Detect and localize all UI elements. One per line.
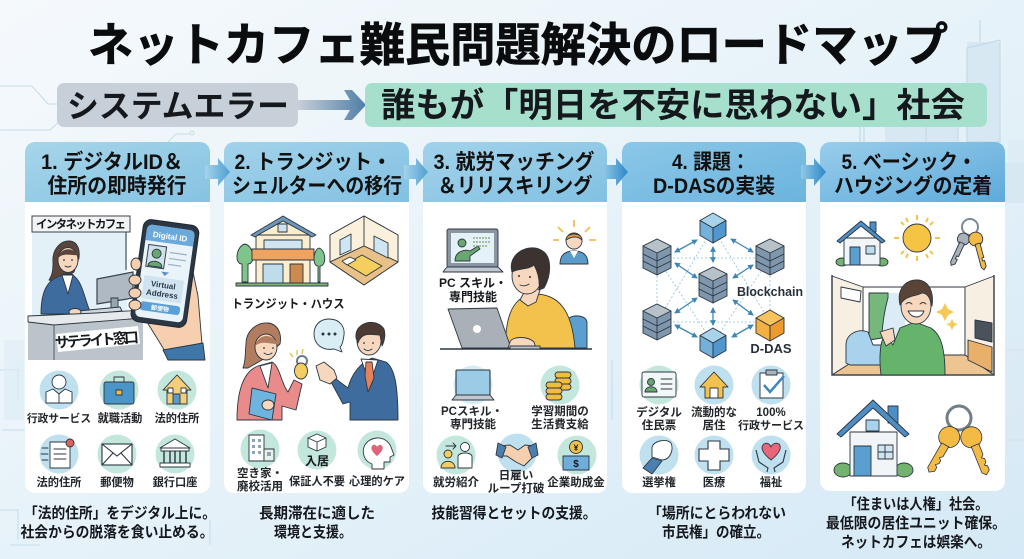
illustration: man working at laptop <box>440 248 592 349</box>
icon: laptop <box>452 366 494 404</box>
panel 4 header: D-DASの実装 <box>653 175 775 198</box>
caption panel 1: 「法的住所」をデジタル上に。 <box>24 504 216 522</box>
label: 福祉 <box>760 475 782 489</box>
label: 選挙権 <box>642 475 676 489</box>
label <box>237 466 283 493</box>
illustration: furnished room <box>330 216 398 285</box>
label: 銀行口座 <box>153 475 197 489</box>
arrow 4 to 5 <box>801 158 826 186</box>
illustration: online class laptop <box>443 229 503 272</box>
panel 1 header: 住所の即時発行 <box>48 175 186 198</box>
icon: mobile residence <box>694 366 734 404</box>
label: 医療 <box>703 475 725 489</box>
panel 5 header: ハウジングの定着 <box>834 174 992 198</box>
illustration: satellite counter at internet cafe: インタネットカフェ <box>36 218 126 231</box>
label: 居住 <box>702 418 726 432</box>
icon: digital resident card <box>640 366 678 404</box>
label: 空き家・ <box>237 466 283 480</box>
diagram: blockchain network <box>643 213 784 358</box>
label: 日雇い <box>499 469 533 482</box>
icon: idea person <box>553 220 596 264</box>
label: デジタル <box>636 405 682 419</box>
panel 4 header <box>622 142 806 202</box>
caption panel 2: 長期滞在に適した <box>259 504 375 522</box>
icon: no guarantor move-in <box>298 430 336 470</box>
caption panel 1 <box>20 504 216 541</box>
illustration: satellite counter at internet cafe <box>28 216 205 360</box>
icon: mail envelope <box>98 434 136 474</box>
label <box>636 405 682 432</box>
panel 5 header: 5. ベーシック・ <box>842 151 976 174</box>
illustration: transit house <box>236 216 328 286</box>
arrow: banner transition <box>298 90 366 120</box>
arrow 1 to 2 <box>205 158 230 186</box>
icon: legal address document <box>40 434 78 474</box>
panel 2: transit shelter <box>224 142 409 493</box>
label: 就職活動 <box>98 411 142 425</box>
panel 2 header <box>224 142 409 202</box>
caption panel 5: 最低限の居住ユニット確保。 <box>826 514 1006 532</box>
caption panel 5: ネットカフェは娯楽へ。 <box>841 534 991 551</box>
label: 就労紹介 <box>433 475 479 489</box>
label: PC skill: 専門技能 <box>449 289 497 304</box>
label: ループ打破 <box>488 481 545 495</box>
icon: big keys <box>920 406 996 479</box>
illustration: speech bubble <box>314 319 344 352</box>
label: Blockchain: Blockchain <box>737 284 803 299</box>
label: 心理的ケア <box>349 474 405 488</box>
icon: vacant house reuse <box>240 430 280 468</box>
caption panel 5 <box>826 495 1006 551</box>
panel 2 header: シェルターへの移行 <box>232 175 402 198</box>
caption panel 1: 社会からの脱落を食い止める。 <box>20 523 214 541</box>
label: 流動的な <box>691 405 737 419</box>
caption panel 2: 環境と支援。 <box>274 524 352 541</box>
label: PC skill <box>439 276 507 304</box>
icon: coins <box>540 366 580 404</box>
icon: small keys <box>946 219 991 272</box>
panel 1: digital ID <box>25 142 210 493</box>
icon: voting rights fist <box>640 436 678 474</box>
icon: company subsidy: ¥ <box>574 442 579 452</box>
label <box>531 404 589 431</box>
banner: goal society: 誰もが「明日を不安に思わない」社会 <box>381 86 965 125</box>
panel 1 header: 1. デジタルID＆ <box>41 150 183 174</box>
illustration: satellite counter at internet cafe: Address <box>146 288 179 301</box>
panel 5: basic housing <box>820 142 1005 491</box>
label: 行政サービス <box>738 418 804 432</box>
icon: legal address house <box>158 370 196 410</box>
icon: bank <box>156 434 194 474</box>
label: 住民票 <box>642 418 676 432</box>
label: transit house: トランジット・ハウス <box>232 297 344 311</box>
icon: no guarantor move-in: 入居 <box>305 454 329 468</box>
illustration: woman with keys <box>237 323 308 420</box>
label: 100% <box>756 407 786 419</box>
caption panel 4 <box>648 505 786 541</box>
panel 3 header: 3. 就労マッチング <box>434 150 594 174</box>
label: 企業助成金 <box>547 475 605 489</box>
illustration: man in suit <box>316 322 398 420</box>
label: 保証人不要 <box>289 475 345 488</box>
caption panel 4: 市民権」の確立。 <box>662 523 770 541</box>
label: 専門技能 <box>450 417 496 431</box>
illustration: satellite counter at internet cafe: サテライト窓口 <box>54 328 139 352</box>
label: 法的住所 <box>37 475 81 489</box>
panel 4 header: 4. 課題： <box>672 151 750 174</box>
label <box>441 405 503 431</box>
icon: handshake <box>496 434 538 472</box>
label: PCスキル・ <box>441 405 503 418</box>
panel 3: job matching <box>423 142 607 495</box>
icon: medical cross <box>694 436 734 474</box>
label: 法的住所 <box>155 411 199 425</box>
caption panel 2 <box>259 504 375 541</box>
icon: sun <box>894 215 940 261</box>
label: 廃校活用 <box>237 479 283 493</box>
title: ネットカフェ難民問題解決のロードマップ <box>88 19 948 71</box>
panel 4: D-DAS <box>622 142 806 493</box>
illustration: satellite counter at internet cafe: 郵便物 <box>151 303 169 314</box>
label: 学習期間の <box>531 404 589 418</box>
label: 行政サービス <box>27 412 91 425</box>
icon: psychological care <box>358 430 396 470</box>
label: D-DAS: D-DAS <box>750 341 792 356</box>
panel 3 header <box>423 142 607 202</box>
caption panel 3: 技能習得とセットの支援。 <box>432 504 596 522</box>
arrow 2 to 3 <box>404 158 428 186</box>
icon: government services <box>40 370 78 410</box>
label: PC skill: PC スキル・ <box>439 276 507 290</box>
icon: job referral <box>436 436 476 474</box>
panel 5 header <box>820 142 1005 202</box>
label: 生活費支給 <box>531 417 589 431</box>
icon: big house <box>834 400 913 477</box>
label <box>691 405 737 432</box>
icon: company subsidy: $ <box>573 459 579 470</box>
panel 3 header: ＆リリスキリング <box>438 174 592 198</box>
label: 郵便物 <box>100 475 134 489</box>
icon: 100% admin checklist <box>752 366 790 404</box>
illustration: room with happy man <box>832 275 994 375</box>
icon: welfare heart hands <box>752 436 790 474</box>
caption panel 5: 「住まいは人権」社会。 <box>844 495 988 513</box>
arrow 3 to 4 <box>603 158 628 186</box>
label <box>738 407 804 432</box>
icon: job hunting briefcase <box>100 370 138 410</box>
panel 2 header: 2. トランジット・ <box>234 151 392 174</box>
icon: small house <box>836 221 888 266</box>
caption panel 4: 「場所にとらわれない <box>648 505 786 522</box>
icon: company subsidy <box>558 436 596 474</box>
illustration: satellite counter at internet cafe: Digital ID <box>152 230 188 244</box>
label <box>488 469 545 495</box>
banner: system error: システムエラー <box>67 88 289 124</box>
illustration: satellite counter at internet cafe: Virtual <box>150 279 176 292</box>
panel 1 header <box>25 142 210 202</box>
